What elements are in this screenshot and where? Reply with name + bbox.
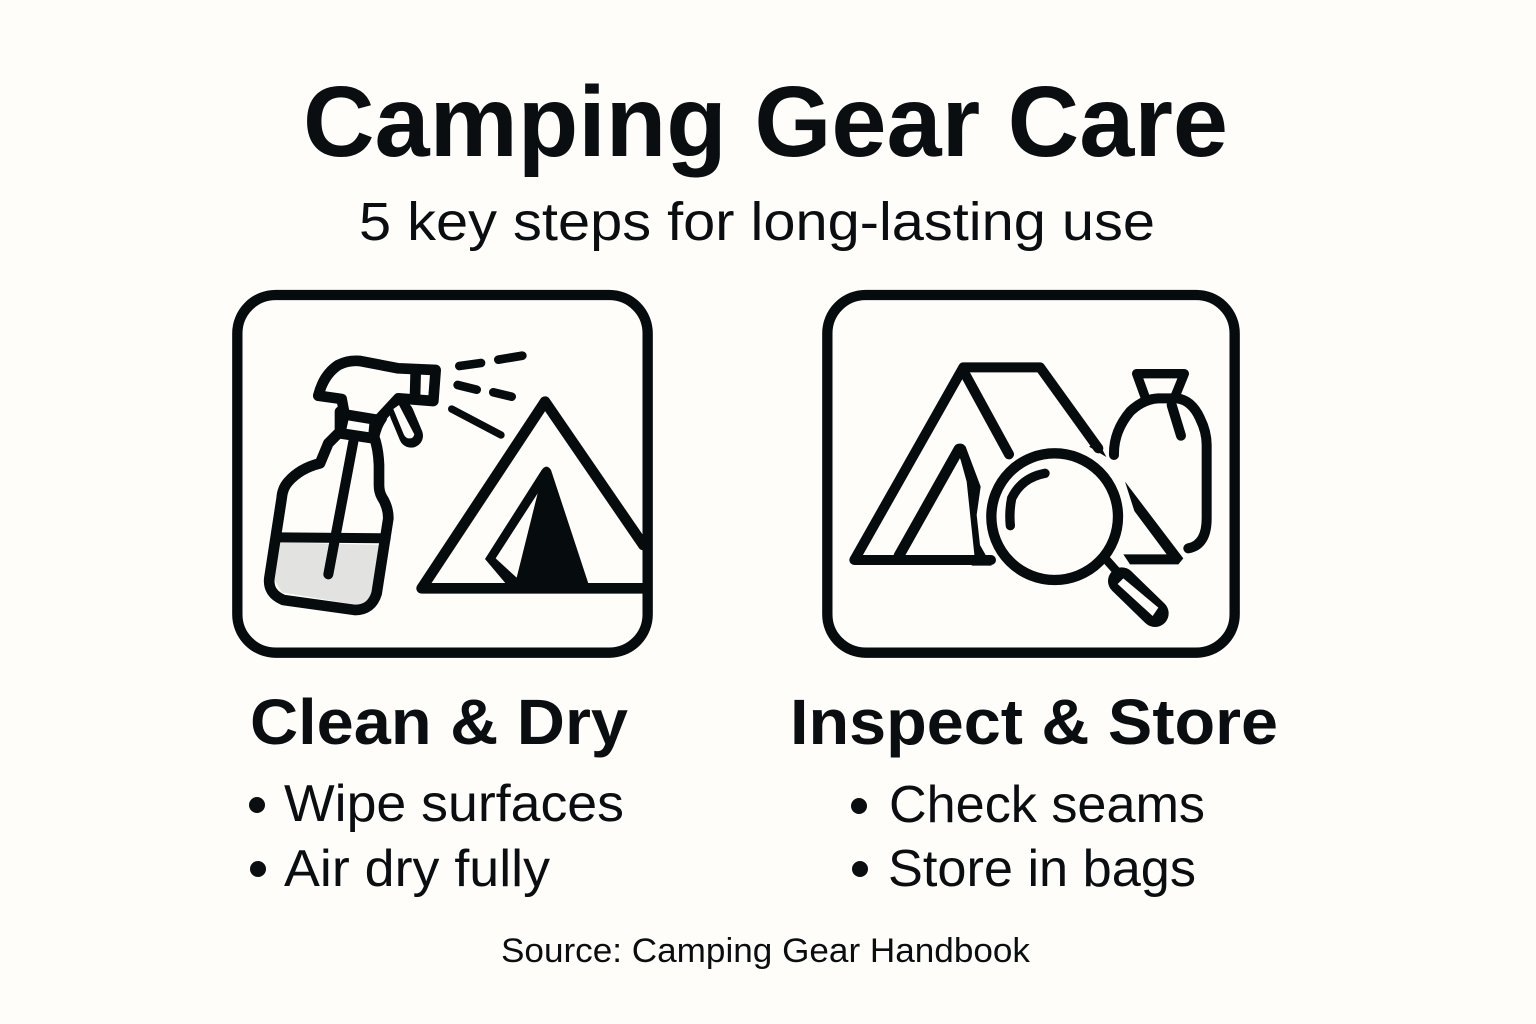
card border [237, 295, 648, 653]
bullet list: clean and dry [249, 775, 624, 898]
panel: inspect and store icon card [827, 295, 1235, 653]
subtitle: 5 key steps for long-lasting use [359, 192, 1155, 252]
bullet list: inspect and store [851, 776, 1205, 898]
heading: inspect and store: Inspect & Store [790, 686, 1278, 758]
icon: spray bottle [269, 361, 436, 610]
icon: storage bag [1114, 374, 1207, 548]
icon: tent under inspection [854, 367, 1183, 566]
bullet list: clean and dry: Air dry fully [284, 840, 550, 898]
source note: Source: Camping Gear Handbook [501, 932, 1031, 970]
bullet list: clean and dry: Wipe surfaces [284, 775, 624, 833]
icon: tent being sprayed [422, 402, 643, 588]
heading: clean and dry: Clean & Dry [250, 686, 628, 758]
card border [827, 295, 1235, 653]
bullet list: inspect and store: Store in bags [888, 840, 1196, 898]
title: Camping Gear Care [303, 66, 1228, 178]
icon: magnifying glass [991, 453, 1158, 616]
panel: clean and dry icon card [237, 295, 648, 653]
icon: spray droplets [452, 356, 522, 435]
bullet list: inspect and store: Check seams [889, 776, 1205, 834]
